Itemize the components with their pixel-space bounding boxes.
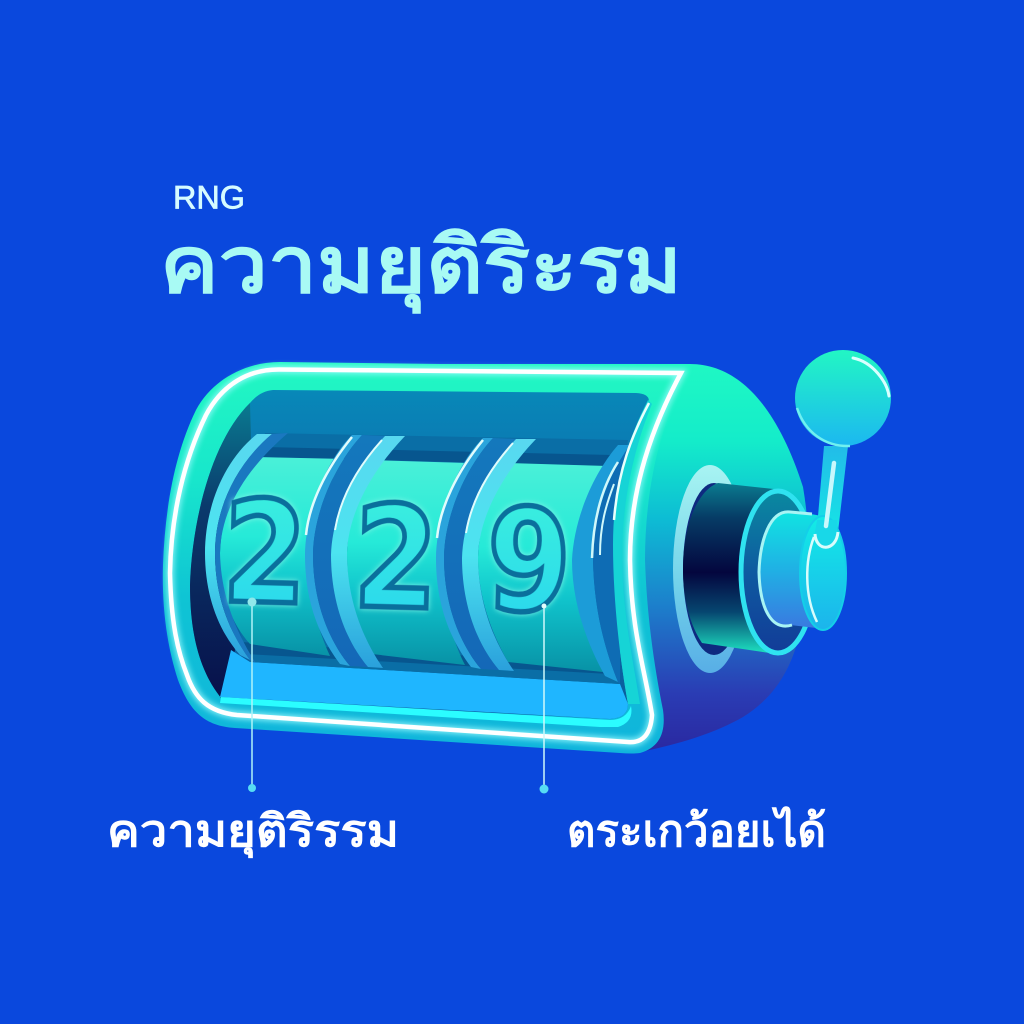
- digit 2: 2: [221, 471, 309, 637]
- ring 4: [572, 445, 630, 684]
- ring 2: [305, 435, 405, 668]
- bottom shadow strip: [240, 642, 610, 674]
- digit 9: 9: [485, 479, 573, 645]
- inner cap: [759, 512, 825, 629]
- inner window highlight: [614, 403, 649, 520]
- lever base: [815, 520, 837, 547]
- ring 3: [436, 438, 536, 671]
- left dark wedge: [190, 403, 251, 699]
- socket: [683, 483, 745, 655]
- dark cylinder: [683, 483, 783, 655]
- reel drum band: [215, 433, 628, 684]
- label right: ตระเกว้อยเได้: [567, 805, 826, 856]
- tray highlight: [220, 697, 631, 727]
- knob assembly: [673, 350, 891, 673]
- slot machine illustration: [163, 350, 891, 794]
- front frame: [163, 362, 686, 754]
- digit 2: 2: [352, 476, 440, 642]
- reel face 3: [478, 463, 607, 672]
- lever shaft: [817, 446, 848, 532]
- lever base arc: [815, 532, 838, 547]
- ball rim: [797, 408, 850, 446]
- inner cap rim: [759, 512, 812, 626]
- collar: [741, 491, 815, 653]
- leader line left: [248, 598, 256, 792]
- tray: [220, 650, 631, 727]
- reel face 1: [220, 457, 347, 656]
- label left: ความยุติริรรม: [107, 807, 399, 859]
- top shadow strip: [258, 447, 612, 466]
- reel face 2: [347, 460, 467, 665]
- reels: [205, 400, 652, 704]
- cap end highlight: [807, 537, 817, 622]
- neon white line: [170, 369, 681, 742]
- machine body side: [400, 364, 809, 752]
- lever highlight: [826, 463, 834, 526]
- title: ความยุติริะรม: [160, 221, 682, 314]
- small heading: RNG: RNG: [173, 180, 245, 216]
- window opening: [190, 390, 649, 719]
- outer ring: [673, 465, 747, 673]
- cap end: [800, 516, 846, 630]
- ball highlight: [853, 358, 889, 396]
- window frame overlay: [613, 400, 652, 704]
- leader line right: [540, 604, 548, 794]
- ball: [795, 350, 891, 446]
- ring 1: [205, 433, 288, 662]
